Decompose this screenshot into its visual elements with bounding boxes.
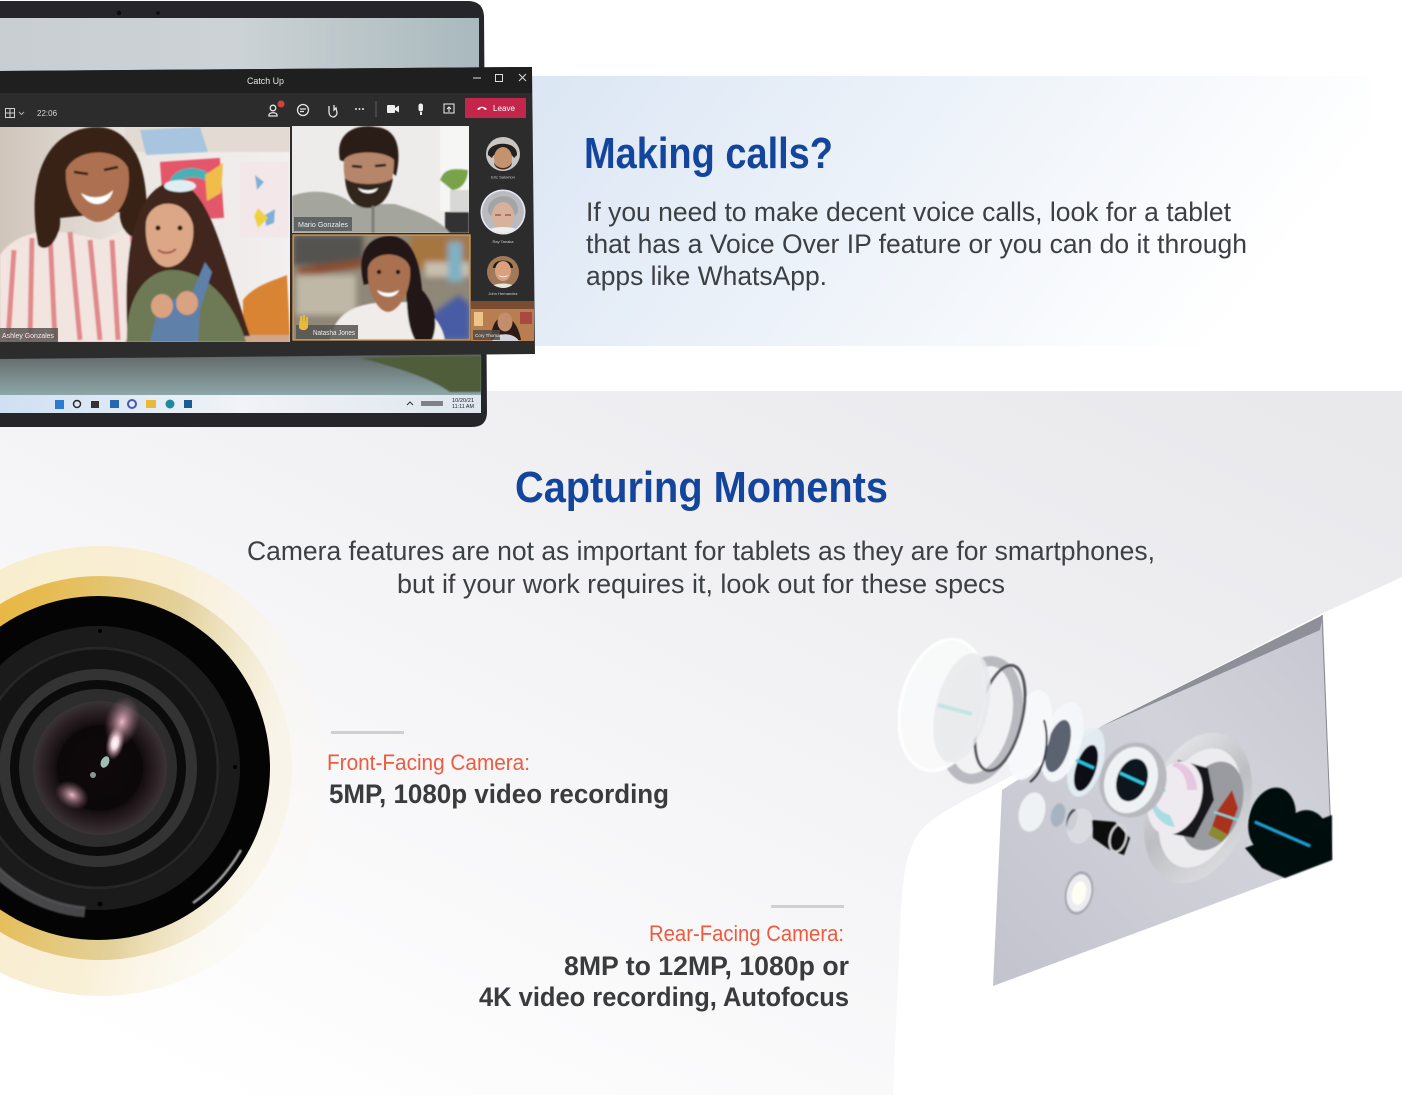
name tag [0, 328, 58, 342]
text block: making calls body [586, 197, 1247, 291]
tablet camera dots [117, 11, 160, 15]
lens barrel rings [0, 626, 240, 910]
toolbar icons [269, 101, 376, 117]
video tile: man [292, 126, 469, 233]
window title: Catch Up [247, 76, 284, 87]
label: Rear-Facing Camera: [649, 921, 844, 946]
windows taskbar [0, 395, 481, 413]
spec [479, 951, 849, 1012]
tablet body [0, 1, 487, 427]
metal plate [993, 615, 1332, 986]
lens element 2 [1032, 697, 1092, 787]
divider [771, 905, 844, 908]
windows taskbar: 11:11 AM [452, 404, 474, 410]
text block: camera intro: but if your work requires it, look out for these specs [397, 569, 1005, 599]
lens body [0, 596, 270, 940]
video tile: woman with raised hand [293, 235, 470, 340]
lens element 4 [1089, 733, 1177, 827]
name tag [294, 217, 352, 231]
flange inner chrome [1169, 753, 1255, 859]
sidebar avatar 1 [486, 137, 520, 171]
toolbar left: 22:06 [37, 109, 58, 118]
panel: capturing moments background [0, 391, 1402, 1095]
daughter face [146, 204, 193, 267]
camera module illustration [886, 615, 1333, 986]
mother face [66, 152, 129, 222]
text block: making calls body: If you need to make decent voice calls, look for a tablet [586, 197, 1231, 227]
sidebar avatar 3 [487, 256, 519, 288]
window frame [0, 67, 535, 359]
text block: camera intro [247, 536, 1155, 599]
heading: making calls: Making calls? [584, 129, 833, 178]
divider [331, 731, 404, 734]
more dots [355, 108, 364, 110]
camera mic share icons [387, 104, 454, 115]
leave button [465, 98, 526, 118]
icon: camera lens [0, 546, 325, 996]
daughter shirt [127, 270, 246, 342]
video call window [0, 67, 535, 359]
small video tile: Cory Thomas [475, 333, 503, 338]
secondary small lens [1015, 789, 1130, 855]
name tag: Ashley Gonzales [2, 331, 54, 340]
sidebar avatar 3 name: John Hernandez [488, 291, 518, 296]
mother hair [35, 127, 147, 248]
text block: camera intro: Camera features are not as important for tablets as they are for smartphones, [247, 536, 1155, 566]
daughter hands [151, 294, 173, 318]
mother shirt [0, 228, 132, 342]
sidebar avatar 1 name: Eric Salomon [491, 174, 515, 180]
colored sensor [1212, 790, 1238, 835]
name tag [296, 325, 358, 339]
raised hand icon [299, 315, 308, 330]
text block: making calls body: that has a Voice Over IP feature or you can do it through [586, 229, 1247, 259]
small video tile [471, 301, 534, 341]
daughter hair [126, 182, 250, 340]
main video: mother and daughter [0, 127, 290, 343]
rear sensor black casing [1241, 782, 1333, 878]
front glass disc [886, 630, 998, 780]
text block: making calls body: apps like WhatsApp. [586, 261, 827, 291]
white curved swoosh behind camera module [893, 577, 1402, 1095]
daughter bow [164, 180, 196, 192]
flash [1061, 869, 1097, 917]
leave button: Leave [493, 103, 515, 113]
sidebar avatar 2 name: Ray Tanaka [492, 239, 514, 244]
front-facing camera callout [327, 731, 669, 809]
title bar [0, 67, 532, 93]
spec: 8MP to 12MP, 1080p or [564, 951, 849, 981]
toolbar left [5, 108, 58, 118]
windows taskbar: 10/20/21 [452, 398, 474, 404]
tablet screen wallpaper [0, 18, 481, 396]
lens element 3 [1060, 723, 1112, 801]
spec: 4K video recording, Autofocus [479, 982, 849, 1012]
window controls [473, 74, 526, 82]
name tag: Mario Gonzales [298, 220, 348, 229]
sidebar avatar 2 [480, 190, 526, 234]
active speaker border [293, 235, 470, 340]
gold ring [0, 576, 292, 960]
spec: 5MP, 1080p video recording [329, 779, 669, 809]
panel: making calls background [530, 76, 1370, 346]
rear-facing camera callout [479, 905, 849, 1012]
heading: capturing moments: Capturing Moments [515, 463, 888, 512]
label: Front-Facing Camera: [327, 750, 530, 775]
barrel cylinder [1160, 760, 1214, 838]
name tag: Natasha Jones [313, 328, 355, 337]
barrel screws [98, 629, 237, 906]
notification badge [278, 100, 284, 108]
tablet with video call [0, 1, 535, 427]
lens flares [99, 692, 145, 752]
main flange [1124, 718, 1272, 898]
metal ring [933, 653, 1029, 787]
outer pale halo [0, 546, 325, 996]
